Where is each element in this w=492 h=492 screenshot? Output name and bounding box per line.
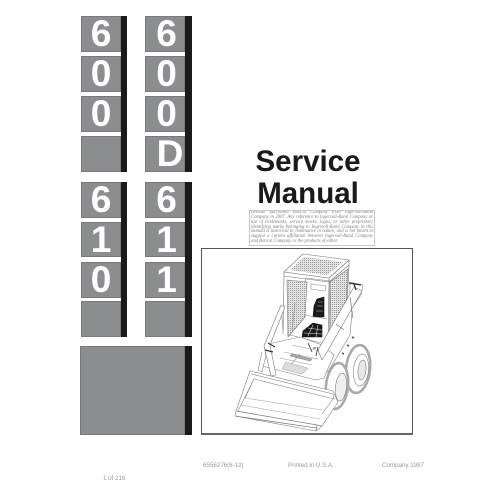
black side bar — [185, 16, 192, 172]
digit tile 0 — [81, 96, 121, 132]
digit tile 1: 1 — [91, 219, 111, 260]
footer: printed in: Printed in U.S.A. — [288, 462, 334, 469]
panel: model 600 column — [81, 13, 127, 172]
panel: loader illustration — [201, 248, 413, 435]
digit tile 6: 6 — [91, 13, 111, 54]
right side tower — [320, 305, 352, 372]
left lift arm — [264, 305, 285, 376]
grey block — [80, 346, 185, 435]
digit tile 6 — [145, 16, 185, 52]
loader body — [262, 337, 334, 380]
lift arm rear — [340, 282, 363, 318]
cab roof — [284, 254, 349, 278]
roof mesh — [290, 257, 343, 275]
blank tile — [145, 301, 185, 337]
cab right mesh — [330, 269, 348, 340]
cab interior — [290, 278, 330, 345]
seat base — [302, 323, 322, 337]
cab frame — [283, 260, 349, 345]
digit tile 6: 6 — [156, 179, 177, 220]
title: Manual — [257, 177, 359, 210]
blank tile — [81, 301, 121, 337]
footer: company: Company 1987 — [382, 462, 424, 469]
digit tile 0: 0 — [156, 93, 177, 134]
digit tile 0: 0 — [156, 53, 177, 94]
panel: model 611 column — [145, 179, 192, 337]
seat back — [313, 297, 324, 317]
digit tile 1 — [145, 262, 185, 298]
black side bar — [185, 346, 192, 435]
panel: model 600D column — [145, 13, 192, 174]
black side bar — [121, 182, 127, 337]
digit tile 1 — [81, 222, 121, 257]
bucket — [235, 371, 338, 431]
digit tile 1: 1 — [156, 219, 177, 260]
digit tile 6 — [81, 182, 121, 218]
digit tile 0 — [145, 56, 185, 92]
digit tile 1: 1 — [156, 259, 177, 300]
digit tile 0 — [81, 262, 121, 298]
notice text block: Doosan purchased Bobcat Company from Ingersoll-Rand Company in 2007. Any reference to Ingersoll-Rand Company or use of trademarks, service marks, logos, or other proprietary identifying marks belonging to Ingersoll-Rand Company in this manual is historical or nominative in nature, and is not meant to suggest a current affiliation between Ingersoll-Rand Company and Bobcat Company or the products of either. — [251, 210, 373, 244]
footer: page count: 1 of 216 — [103, 475, 125, 482]
digit tile 6 — [145, 182, 185, 218]
lift arm front — [318, 287, 362, 360]
digit tile 0 — [145, 96, 185, 132]
panel: large blank block — [80, 346, 192, 435]
panel: model 610 column — [81, 179, 127, 337]
cab left mesh — [287, 280, 307, 337]
front wheel — [324, 362, 350, 410]
title: Service — [256, 145, 360, 178]
digit tile 6: 6 — [91, 179, 111, 220]
digit tile 0: 0 — [91, 53, 111, 94]
letter tile D: D — [157, 133, 183, 174]
cab inner bars — [281, 284, 327, 330]
digit tile 6: 6 — [156, 13, 177, 54]
rear wheel — [344, 344, 372, 394]
black side bar — [121, 16, 127, 172]
digit tile 0: 0 — [91, 93, 111, 134]
title — [256, 145, 360, 210]
digit tile 1 — [145, 222, 185, 257]
digit tile 6 — [81, 16, 121, 52]
digit tile 0 — [81, 56, 121, 92]
letter tile D — [145, 136, 185, 172]
footer: part number: 6556276(6-12) — [203, 462, 244, 469]
digit tile 0: 0 — [91, 259, 111, 300]
blank tile — [81, 136, 121, 172]
black side bar — [185, 182, 192, 337]
